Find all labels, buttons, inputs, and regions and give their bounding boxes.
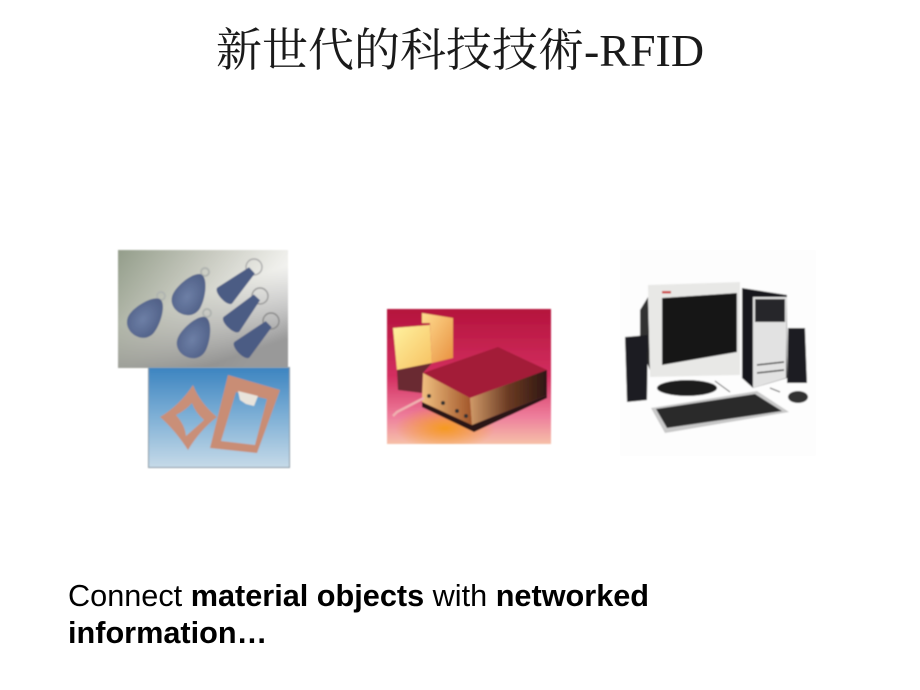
mouse: [788, 391, 808, 403]
left speaker: [625, 335, 648, 402]
computer tower: [742, 288, 787, 388]
right speaker: [787, 328, 807, 383]
title: 新世代的科技技術-RFID: [216, 25, 704, 76]
antenna: right rectangular inlay: [210, 375, 280, 453]
caption text: information…: [68, 616, 267, 650]
reader box body: [422, 347, 547, 432]
antenna: left curved inlay: [160, 385, 217, 450]
photo: RFID key fobs: [118, 250, 288, 368]
caption text: Connect material objects with networked: [68, 579, 649, 613]
reader antenna panels: [393, 313, 453, 393]
fob: teardrop tags: [121, 267, 219, 363]
fob: long tags with rings: [214, 259, 279, 361]
photo: RFID reader box: [387, 309, 551, 450]
photo: copper antenna inlays: [148, 368, 290, 468]
computer monitor: [640, 282, 740, 396]
photo illustrations: [117, 249, 809, 469]
keyboard: [651, 391, 789, 433]
caption text: [68, 579, 649, 650]
photo: desktop computer: [620, 250, 816, 456]
